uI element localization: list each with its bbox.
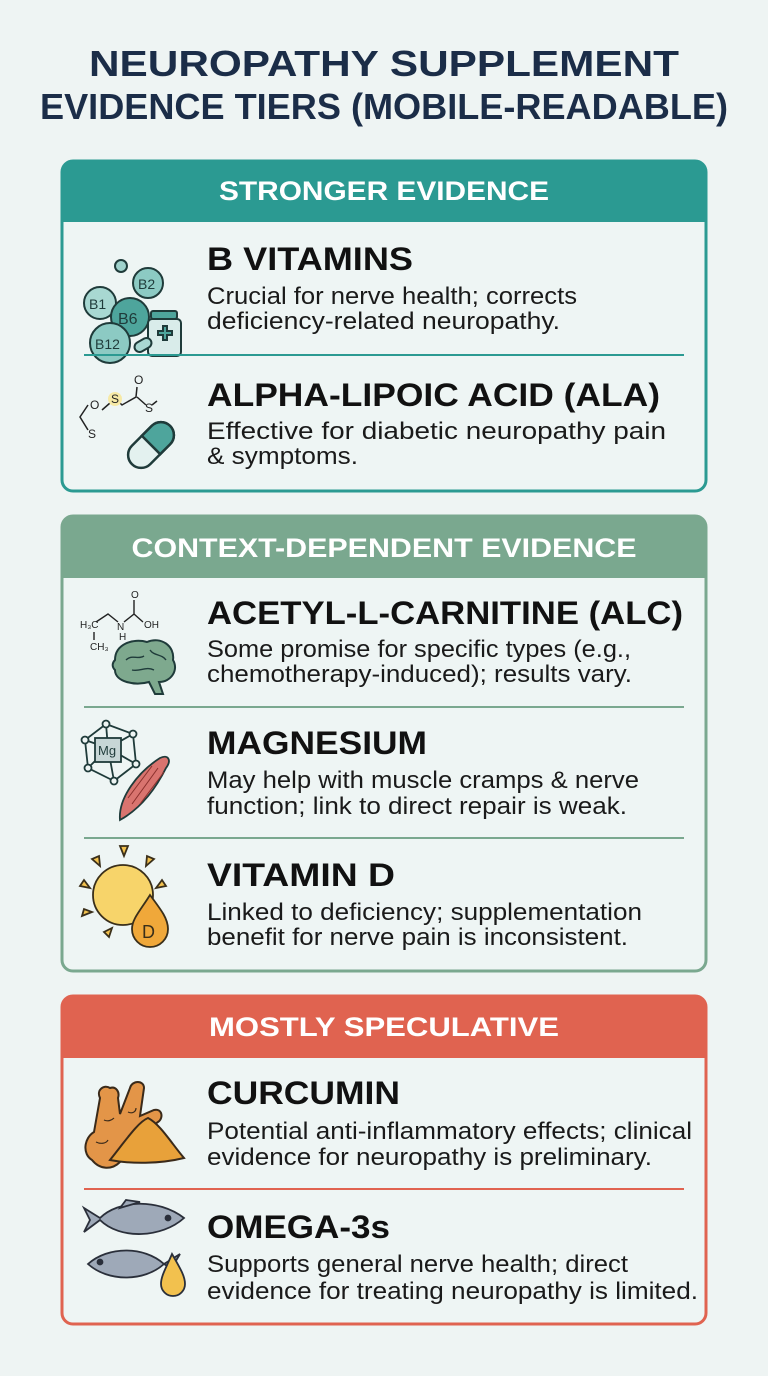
icon: ALA molecule and capsule: O — [90, 398, 99, 412]
icon: carnitine molecule and brain: OH — [144, 620, 159, 631]
icon: carnitine molecule and brain: O — [131, 590, 139, 601]
icon: b vitamins: B6 — [118, 311, 138, 328]
divider — [84, 706, 684, 708]
icon: magnesium crystal and muscle: Mg — [98, 743, 116, 758]
icon: b vitamins: B2 — [138, 276, 155, 292]
icon: ALA molecule and capsule: O — [134, 373, 143, 387]
item: vitamin d: benefit for nerve pain is inconsistent. — [207, 924, 628, 951]
item: acetyl-l-carnitine: chemotherapy-induced); results vary. — [207, 661, 632, 688]
item: b vitamins: B VITAMINS — [207, 241, 413, 277]
item: vitamin d: VITAMIN D — [207, 857, 395, 893]
icon: carnitine molecule and brain: H — [119, 632, 126, 643]
item: b vitamins: deficiency-related neuropathy. — [207, 308, 560, 335]
item: curcumin: evidence for neuropathy is preliminary. — [207, 1144, 652, 1171]
icon: ALA molecule and capsule: S — [145, 401, 153, 415]
icon: b vitamins: B1 — [89, 296, 106, 312]
item: curcumin: CURCUMIN — [207, 1075, 400, 1111]
item: curcumin: Potential anti-inflammatory effects; clinical — [207, 1118, 692, 1145]
item: acetyl-l-carnitine: Some promise for specific types (e.g., — [207, 636, 631, 663]
title: NEUROPATHY SUPPLEMENT — [89, 43, 679, 84]
item: omega-3s: OMEGA-3s — [207, 1209, 390, 1245]
icon: carnitine molecule and brain — [80, 590, 175, 694]
icon: sun and vitamin D drop: D — [142, 922, 155, 942]
title — [40, 43, 728, 127]
item: curcumin — [207, 1075, 692, 1171]
item: magnesium: MAGNESIUM — [207, 725, 427, 761]
item: alpha-lipoic acid: ALPHA-LIPOIC ACID (ALA) — [207, 377, 660, 413]
item: omega-3s: evidence for treating neuropathy is limited. — [207, 1278, 698, 1305]
item: alpha-lipoic acid: & symptoms. — [207, 443, 358, 470]
item: vitamin d: Linked to deficiency; supplementation — [207, 899, 642, 926]
item: alpha-lipoic acid: Effective for diabetic neuropathy pain — [207, 418, 666, 445]
panel: mostly speculative — [62, 996, 706, 1324]
icon: medicine bottle — [133, 311, 181, 356]
item: vitamin d — [207, 857, 642, 951]
heading: stronger evidence: STRONGER EVIDENCE — [219, 176, 549, 206]
heading: mostly speculative: MOSTLY SPECULATIVE — [209, 1012, 559, 1042]
item: b vitamins: Crucial for nerve health; corrects — [207, 283, 577, 310]
item: alpha-lipoic acid — [207, 377, 666, 470]
item: magnesium — [207, 725, 639, 820]
item: b vitamins — [207, 241, 577, 335]
icon: fish and oil drop — [84, 1200, 185, 1296]
heading: context-dependent evidence: CONTEXT-DEPENDENT EVIDENCE — [132, 533, 636, 563]
divider — [84, 1188, 684, 1190]
icon: magnesium crystal and muscle — [82, 720, 169, 820]
panel: context-dependent evidence — [62, 516, 706, 971]
icon: b vitamins: B12 — [95, 336, 120, 352]
item: omega-3s — [207, 1209, 698, 1305]
icon: b vitamins — [84, 260, 163, 363]
title: EVIDENCE TIERS (MOBILE-READABLE) — [40, 86, 728, 127]
divider — [84, 354, 684, 356]
item: magnesium: May help with muscle cramps & nerve — [207, 767, 639, 794]
icon: ALA molecule and capsule: S — [88, 427, 96, 441]
icon: ALA molecule and capsule: S — [111, 392, 119, 406]
icon: carnitine molecule and brain: CH₃ — [90, 642, 109, 653]
panel: stronger evidence — [62, 161, 706, 491]
icon: sun and vitamin D drop — [80, 846, 168, 947]
item: acetyl-l-carnitine — [207, 595, 683, 688]
item: magnesium: function; link to direct repair is weak. — [207, 793, 627, 820]
icon: turmeric root and powder — [85, 1082, 184, 1168]
icon: carnitine molecule and brain: H₃C — [80, 620, 99, 631]
icon: ALA molecule and capsule — [80, 373, 179, 473]
icon: carnitine molecule and brain: N — [117, 622, 124, 633]
item: acetyl-l-carnitine: ACETYL-L-CARNITINE (ALC) — [207, 595, 683, 631]
divider — [84, 837, 684, 839]
item: omega-3s: Supports general nerve health; direct — [207, 1251, 628, 1278]
